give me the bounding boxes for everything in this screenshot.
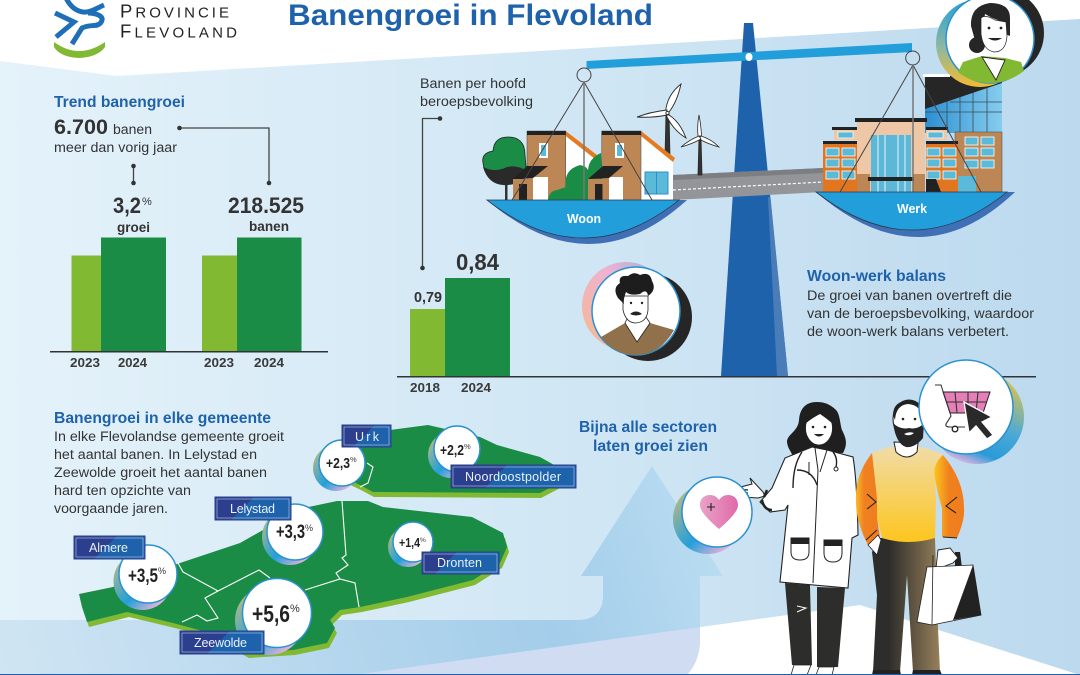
tree [483, 137, 527, 200]
figure: man with shopping bag [856, 400, 981, 675]
bubble: Almere +3,5%: +3,5 [128, 566, 158, 587]
body text: het aantal banen. In Lelystad en [54, 447, 257, 462]
road [673, 168, 823, 200]
pan: Werk: Werk [897, 201, 928, 216]
bubble: Lelystad +3,3%: % [305, 523, 313, 533]
bar chart: groei: 2024 [118, 355, 148, 370]
badge: Dronten [422, 552, 499, 574]
body text: Zeewolde groeit het aantal banen [54, 465, 267, 480]
map of Flevoland [79, 425, 566, 658]
icon: shopping cart bubble [919, 360, 1024, 464]
heading: bijna alle sectoren: laten groei zien [593, 438, 708, 455]
bubble: Dronten +1,4%: % [420, 537, 426, 544]
heading: Trend banengroei [54, 94, 185, 111]
bubble: Noordoostpolder +2,2%: +2,2 [440, 442, 464, 459]
bar chart: groei: 2023 [70, 355, 100, 370]
bubble: Urk +2,3% [313, 440, 365, 491]
badge: Lelystad: Lelystad [230, 502, 275, 516]
bubble: Zeewolde +5,6%: % [290, 603, 300, 615]
bar chart: banen per hoofd: 0,84 [456, 249, 499, 275]
connector to bars [420, 116, 442, 270]
connector to 3,2% [131, 164, 136, 185]
bubble: Dronten +1,4% [388, 522, 433, 567]
wind turbines [637, 84, 719, 175]
bar chart: banen per hoofd: 2018 [410, 380, 440, 395]
badge: Zeewolde: Zeewolde [194, 636, 247, 650]
value: 218.525 banen [228, 193, 304, 234]
connector to 218.525 [177, 126, 271, 185]
badge: Noordoostpolder: Noordoostpolder [465, 470, 561, 484]
text block: woon-werk balans: De groei van banen overtreft die [807, 288, 1012, 303]
bar chart: banen per hoofd: 2024 [461, 380, 492, 395]
bubble: Almere +3,5%: % [158, 566, 166, 576]
bubble: Dronten +1,4%: +1,4 [399, 535, 421, 550]
badge: Almere [74, 536, 145, 559]
growth arrow [0, 466, 723, 674]
icon: man portrait [582, 262, 692, 361]
bar chart: banen per hoofd [410, 249, 510, 395]
value: 3,2% groei: 3,2 [113, 193, 141, 218]
value: 218.525 banen: 218.525 [228, 193, 304, 218]
body text: In elke Flevolandse gemeente groeit [54, 429, 284, 444]
badge: Lelystad [215, 497, 291, 520]
bubble: Zeewolde +5,6%: +5,6 [252, 601, 290, 628]
heading: bijna alle sectoren: Bijna alle sectoren [579, 419, 717, 436]
text: 6.700 banen meer dan vorig jaar: banen [113, 122, 152, 137]
label: banen per hoofd beroepsbevolking: beroepsbevolking [420, 94, 533, 109]
panel: woon-werk balance scale [397, 0, 1044, 395]
bubble: Noordoostpolder +2,2% [428, 426, 480, 478]
body text: voorgaande jaren. [54, 501, 168, 516]
bubble: Noordoostpolder +2,2%: % [464, 442, 471, 451]
value: 3,2% groei: % [142, 196, 152, 208]
badge: Dronten: Dronten [437, 556, 482, 570]
text block: woon-werk balans: Woon-werk balans [807, 268, 946, 285]
left pan ropes [512, 68, 652, 200]
logo: Provincie Flevoland: FLEVOLAND [120, 20, 237, 42]
badge: Urk: Urk [355, 430, 380, 444]
text block: woon-werk balans: van de beroepsbevolking, waardoor [807, 306, 1035, 321]
panel: banengroei in elke gemeente [54, 410, 576, 658]
bar chart: groei [70, 238, 166, 370]
scale beam [586, 43, 912, 69]
pan: Woon: Woon [567, 211, 601, 226]
scale column [721, 23, 788, 376]
pan: Woon [487, 200, 687, 244]
logo: Provincie Flevoland: PROVINCIE [120, 0, 229, 22]
white ground shape [353, 605, 1080, 675]
bar chart: banen: 2023 [204, 355, 234, 370]
bar chart: banen: 2024 [254, 355, 285, 370]
badge: Urk [342, 425, 391, 447]
office buildings [823, 74, 1002, 192]
bubble: Urk +2,3%: % [350, 455, 357, 464]
badge: Almere: Almere [89, 541, 128, 555]
text: 6.700 banen meer dan vorig jaar: meer dan vorig jaar [54, 140, 178, 155]
label: banen per hoofd beroepsbevolking [420, 76, 533, 109]
text block: woon-werk balans [807, 268, 1035, 339]
figure: doctor [737, 402, 858, 675]
body text: hard ten opzichte van [54, 483, 191, 498]
bubble: Zeewolde +5,6% [235, 578, 312, 655]
text block: woon-werk balans: de woon-werk balans verbetert. [807, 324, 1009, 339]
panel: trend banengroei [50, 94, 328, 370]
bubble: Lelystad +3,3%: +3,3 [276, 522, 305, 543]
value: 3,2% groei: groei [117, 220, 150, 235]
bar chart: banen per hoofd: 0,79 [414, 290, 442, 306]
body text [54, 429, 284, 516]
value: 218.525 banen: banen [249, 219, 289, 234]
pan: Werk [816, 192, 1015, 237]
text: 6.700 banen meer dan vorig jaar [54, 116, 178, 155]
text: 6.700 banen meer dan vorig jaar: 6.700 [54, 116, 108, 139]
bar chart: banen [202, 238, 302, 370]
badge: Noordoostpolder [451, 465, 576, 488]
badge: Zeewolde [180, 631, 264, 654]
heading: bijna alle sectoren [579, 419, 717, 455]
label: banen per hoofd beroepsbevolking: Banen per hoofd [420, 76, 526, 91]
icon: heart bubble [673, 477, 752, 554]
logo: Provincie Flevoland [54, 0, 237, 58]
icon: woman portrait [936, 0, 1044, 87]
houses [513, 131, 675, 200]
right pan ropes [840, 51, 981, 192]
value: 3,2% groei [113, 193, 152, 235]
bubble: Urk +2,3%: +2,3 [326, 455, 350, 472]
heading: Banengroei in elke gemeente [54, 410, 271, 427]
bottom rule [0, 674, 1080, 675]
bubble: Almere +3,5% [114, 545, 177, 610]
bubble: Lelystad +3,3% [262, 504, 323, 565]
